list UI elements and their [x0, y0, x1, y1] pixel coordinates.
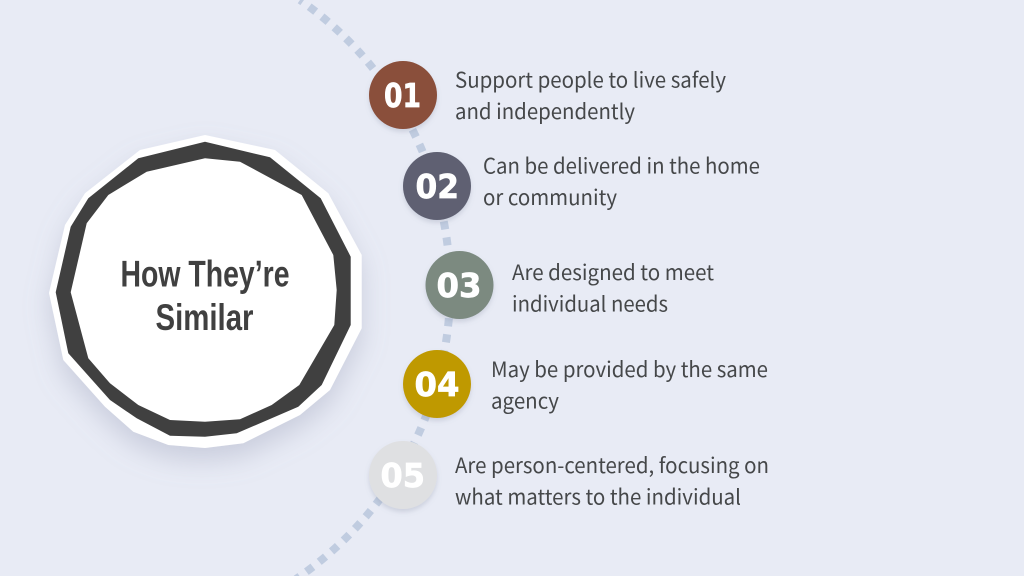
badge dark ring — [56, 142, 351, 437]
text 01 — [455, 64, 726, 126]
number badge 03: 03 — [436, 266, 482, 305]
text 02: Can be delivered in the home — [483, 150, 760, 180]
number badge 05: 05 — [380, 456, 425, 495]
number badge 05 — [369, 441, 437, 509]
text 04: May be provided by the same — [491, 354, 768, 384]
item 01 — [369, 61, 726, 129]
text 05: Are person-centered, focusing on — [455, 450, 769, 480]
text 02: or community — [483, 182, 617, 212]
number badge 01 — [369, 61, 437, 129]
number badge 01: 01 — [384, 76, 421, 115]
item 05 — [369, 441, 769, 512]
number badge 02: 02 — [416, 167, 459, 206]
heading: How They’re — [120, 254, 290, 294]
text 03 — [512, 257, 714, 318]
item 04 — [403, 350, 768, 418]
text 04: agency — [491, 386, 559, 416]
item 02 — [403, 150, 760, 220]
number badge 03 — [426, 251, 494, 319]
text 02 — [483, 150, 760, 212]
heading: Similar — [156, 297, 254, 338]
item 03 — [426, 251, 714, 319]
number badge 02 — [403, 152, 471, 220]
text 01: Support people to live safely — [455, 64, 726, 94]
text 04 — [491, 354, 768, 416]
text 03: individual needs — [512, 288, 668, 318]
central badge — [49, 135, 362, 448]
text 03: Are designed to meet — [512, 257, 714, 287]
text 05: what matters to the individual — [455, 482, 741, 512]
text 05 — [455, 450, 769, 512]
number badge 04: 04 — [414, 365, 460, 404]
heading — [120, 254, 290, 338]
number badge 04 — [403, 350, 471, 418]
badge white outer shape — [49, 135, 362, 448]
dotted arc — [296, 0, 450, 576]
text 01: and independently — [455, 96, 635, 126]
